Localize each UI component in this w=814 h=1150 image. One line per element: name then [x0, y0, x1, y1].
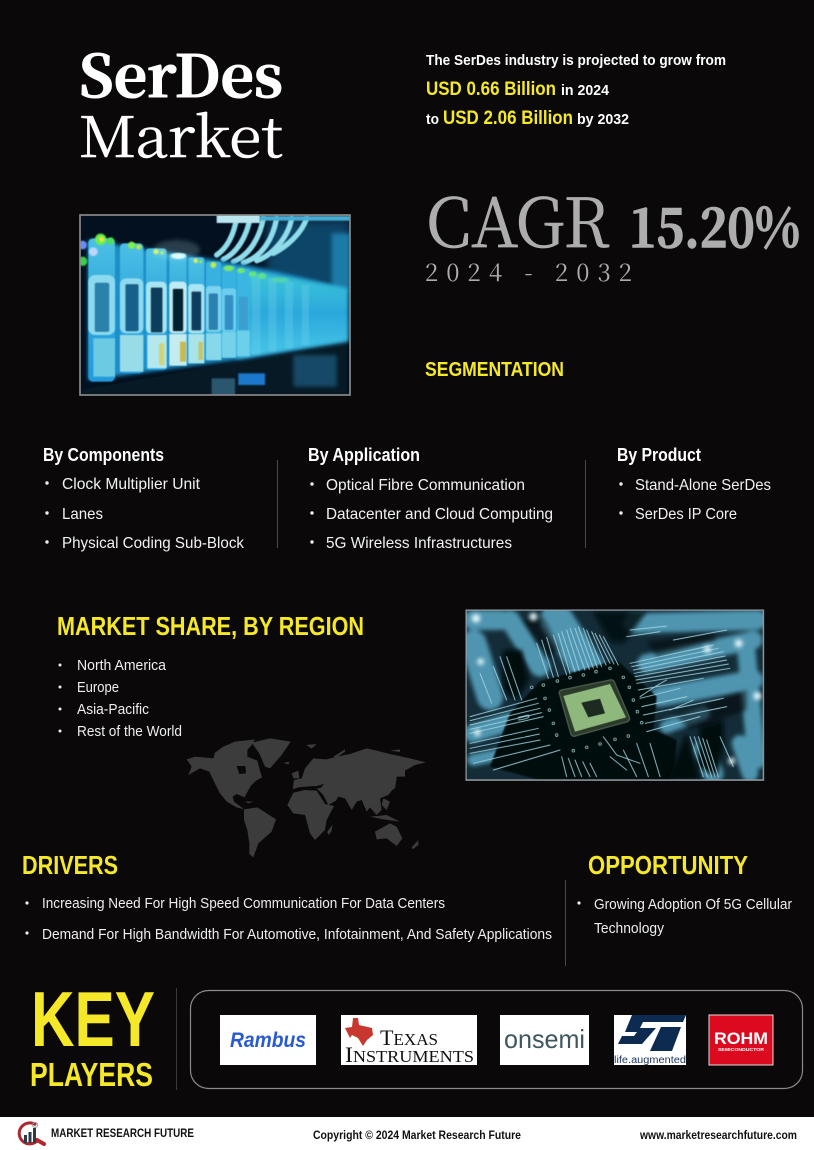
logo: Texas Instruments: TEXAS [380, 1025, 438, 1050]
projection text block: USD 2.06 Billion [443, 108, 573, 129]
heading: opportunity: OPPORTUNITY [588, 850, 748, 880]
footer [0, 1117, 814, 1150]
logo: ST [614, 1015, 686, 1066]
CAGR: 2024 - 2032 [425, 253, 632, 288]
dark circuit zone [490, 660, 677, 780]
segment column: by application: By Application [308, 445, 420, 465]
segment column: by product [617, 445, 771, 523]
bokeh [472, 613, 761, 764]
region list: Asia-Pacific [77, 702, 149, 718]
logo: ROHM: ROHM [714, 1029, 768, 1048]
region list: Rest of the World [77, 724, 182, 740]
heading: drivers: DRIVERS [22, 850, 118, 880]
segment column: by components: Clock Multiplier Unit [62, 476, 201, 493]
logo: ROHM [709, 1015, 773, 1065]
icon: magnifier logo [19, 1122, 44, 1144]
rack blocks [88, 238, 250, 382]
logo: Texas Instruments: INSTRUMENTS [345, 1042, 474, 1067]
LEDs [78, 234, 289, 283]
segment column: by application: Optical Fibre Communication [326, 477, 525, 494]
segment column: by application [308, 445, 553, 552]
logo: Rambus [220, 1015, 316, 1065]
segment column: by product: SerDes IP Core [635, 506, 737, 523]
glow behind rack [88, 240, 347, 380]
projection text block: The SerDes industry is projected to grow from [426, 52, 726, 69]
segment column: by components: By Components [43, 445, 164, 465]
lower plates [93, 331, 250, 377]
projection text block: to [426, 111, 439, 128]
heading: key players: KEY [31, 975, 155, 1063]
opportunity list: Growing Adoption Of 5G Cellular [594, 897, 792, 913]
logo: ROHM: SEMICONDUCTOR [718, 1047, 765, 1052]
segment column: by components: Lanes [62, 506, 103, 523]
region list [58, 658, 182, 740]
map: world [187, 738, 426, 857]
handles [88, 275, 248, 335]
footer: www.marketresearchfuture.com [639, 1130, 797, 1142]
logo: onsemi: onsemi [504, 1024, 585, 1054]
segment column: by application: Datacenter and Cloud Computing [326, 506, 553, 523]
far side fins [252, 275, 309, 355]
photo: server rack [78, 215, 350, 395]
projection text block: by 2032 [577, 111, 629, 128]
footer: MARKET RESEARCH FUTURE [51, 1128, 194, 1140]
logo: Texas Instruments [341, 1015, 477, 1067]
far blocks [237, 268, 348, 358]
heading: key players [30, 975, 155, 1093]
heading: key players: PLAYERS [30, 1056, 153, 1093]
region list: North America [77, 658, 167, 674]
projection text block [426, 52, 726, 129]
logo: onsemi [500, 1015, 589, 1065]
opportunity list [577, 897, 792, 937]
segment column: by product: Stand-Alone SerDes [635, 477, 771, 494]
photo: circuit chip [466, 610, 763, 780]
CAGR [425, 170, 800, 288]
blurred trace bundles [473, 620, 757, 773]
cables [217, 218, 307, 263]
logo: Rambus: Rambus [230, 1029, 306, 1052]
title [79, 30, 283, 174]
heading: segmentation: SEGMENTATION [425, 359, 564, 381]
region list: Europe [77, 680, 119, 696]
projection text block: in 2024 [561, 82, 610, 99]
floor reflection [80, 343, 347, 395]
drivers list: Increasing Need For High Speed Communication For Data Centers [42, 896, 445, 912]
drivers list [25, 896, 552, 943]
projection text block: USD 0.66 Billion [426, 79, 556, 100]
segment column: by components: Physical Coding Sub-Block [62, 535, 245, 552]
segment column: by application: 5G Wireless Infrastructures [326, 535, 512, 552]
title: SerDes [79, 30, 283, 114]
panel: logos [190, 990, 802, 1088]
segment column: by components [43, 445, 245, 552]
opportunity list: Technology [594, 921, 665, 937]
title: Market [79, 94, 283, 174]
CAGR: CAGR [426, 170, 610, 267]
heading: market share by region: MARKET SHARE, BY REGION [57, 611, 364, 641]
drivers list: Demand For High Bandwidth For Automotive, Infotainment, And Safety Applications [42, 927, 552, 943]
traces [470, 626, 733, 777]
logo: ST: life.augmented [614, 1055, 686, 1066]
chip [559, 680, 630, 736]
footer: Copyright © 2024 Market Research Future [313, 1130, 521, 1142]
segment column: by product: By Product [617, 445, 701, 465]
